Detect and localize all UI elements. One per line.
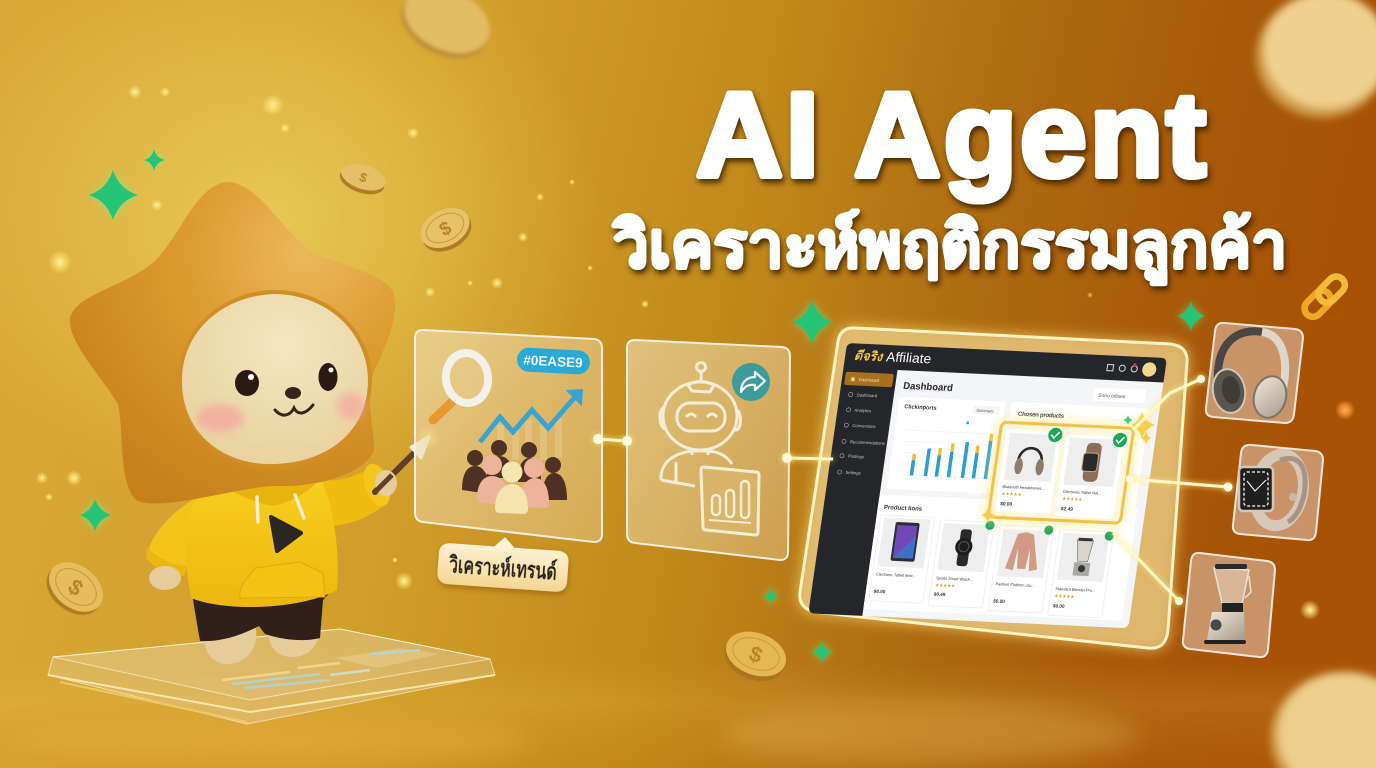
sparkle: green right [1177, 301, 1205, 331]
selected product: headphones: $0.00 [1000, 501, 1013, 508]
coin: upper medium [414, 200, 478, 260]
selected product: headphones: ★★★★★ [1001, 491, 1022, 497]
coin: bottom center: $ [746, 641, 766, 668]
sidebar menu: Conversions [852, 423, 876, 429]
icon: gold chain link [1301, 273, 1348, 320]
connector glow lines [598, 379, 1228, 601]
product: smartwatch [928, 518, 995, 608]
coin: top right blurred [1256, 0, 1376, 118]
mouth [275, 405, 313, 415]
title: AI Agent: AI Agent [696, 68, 1206, 202]
highlighted selection frame [988, 422, 1134, 523]
hood neck [218, 470, 320, 505]
icon: magnifying glass [433, 350, 491, 420]
product: blender [1048, 529, 1114, 618]
selected product: headphones: Bluetooth Headphones... [1002, 485, 1045, 491]
drawstrings [257, 495, 304, 522]
legs [204, 628, 319, 664]
sparkle: green center [792, 300, 833, 344]
sparkle: green left [80, 499, 111, 531]
shorts [192, 586, 336, 641]
coin: lower left [37, 552, 113, 625]
panel: AI robot glass card [627, 340, 790, 560]
nose [285, 387, 301, 399]
tablet glass frame [800, 328, 1187, 648]
coin: upper medium: $ [436, 217, 456, 241]
gold sparkle cluster [981, 412, 1155, 523]
connector nodes [593, 375, 1232, 605]
sidebar menu: Recommendations [850, 439, 885, 446]
header brand [853, 348, 932, 366]
product: blender: Standard Blender Pro... [1055, 587, 1095, 593]
coin: top blurred [391, 0, 501, 71]
panel: tablet dashboard [800, 328, 1187, 648]
date selector [1092, 387, 1146, 403]
pointer stick [375, 426, 440, 496]
product: tablet: $0.00 [874, 589, 886, 594]
tablet screen [808, 343, 1167, 628]
sidebar menu [831, 372, 895, 476]
tag: hashtag [516, 347, 591, 375]
product: smartwatch: $0.49 [934, 592, 946, 597]
coin: upper small: $ [357, 169, 370, 186]
icon: customer crowd [462, 440, 567, 514]
hood rim [178, 290, 372, 470]
product: jacket [988, 523, 1054, 613]
chosen products card: Chosen products [1018, 411, 1065, 420]
date selector: Sono trilises [1098, 393, 1126, 400]
selected product: watch: ★★★★★ [1062, 496, 1083, 502]
coin: lower left: $ [63, 574, 88, 601]
trend chart arrow [480, 390, 582, 460]
product tile: blender [1183, 553, 1275, 657]
coin: bottom right blurred [1270, 672, 1376, 768]
star hood [70, 182, 395, 504]
cheeks [196, 392, 365, 432]
chart card: Clickinports [904, 404, 937, 412]
product: blender: $0.00 [1053, 603, 1065, 609]
icon: teal share badge [732, 363, 770, 401]
glowing light orbs [36, 85, 1355, 620]
product: tablet: Electronic Tablet 8mb... [876, 572, 916, 578]
product: smartwatch: Sports Smart Watch... [936, 576, 973, 582]
product list card [863, 494, 1138, 621]
sidebar menu: Dashboard [856, 392, 878, 398]
pocket [240, 562, 325, 598]
selected product: headphones [995, 430, 1062, 514]
tag: hashtag: #0EASE9 [523, 352, 583, 371]
eyes [235, 363, 338, 396]
icon: bar chart panel [701, 467, 759, 535]
play badge [271, 517, 301, 551]
callout: trend analysis label [437, 533, 570, 592]
sparkle: green top left [89, 170, 138, 220]
subtitle: customer behaviour analysis: วิเคราะห์พฤติกรรมลูกค้า [612, 209, 1287, 285]
sidebar menu: Postings [848, 454, 864, 459]
sparkle: green bottom small [763, 587, 779, 605]
product: jacket: Fashion Platform Jac... [995, 582, 1035, 588]
sidebar menu: Settings [845, 470, 861, 476]
coin: upper small [336, 159, 389, 199]
sidebar menu: Analytics [854, 408, 872, 413]
product: tablet [868, 515, 935, 603]
chart card [887, 397, 1006, 494]
selected product: watch [1055, 434, 1124, 519]
icon: robot outline [660, 362, 740, 486]
panel: trend analysis glass card [415, 330, 602, 542]
header icons [1106, 360, 1157, 377]
coin: bottom center [718, 624, 792, 689]
left arm [146, 495, 203, 590]
product: blender: ★★★★★ [1054, 593, 1075, 599]
check badges [1047, 427, 1128, 448]
sidebar menu: Dashboard [859, 377, 880, 383]
callout: trend analysis label: วิเคราะห์เทรนด์ [447, 551, 558, 585]
chart card: Summary [976, 408, 995, 414]
green sparkle on tablet [1123, 415, 1133, 425]
dashboard heading: Dashboard [902, 381, 954, 394]
product: jacket: $0.00 [993, 598, 1006, 604]
product tile: headphones [1206, 323, 1303, 423]
right arm [310, 460, 395, 526]
glass platform [48, 629, 495, 724]
header brand: Affiliate [885, 349, 932, 366]
selected product: watch: $2.49 [1060, 506, 1074, 513]
character: star mascot [70, 182, 440, 664]
selected product: watch: Electronic Tablet Not... [1063, 490, 1102, 496]
sparkle: green bottom [811, 641, 833, 663]
torso [186, 481, 338, 607]
face [182, 294, 368, 464]
product tile: smartwatch [1233, 445, 1323, 540]
chosen products card [996, 402, 1150, 519]
product: smartwatch: ★★★★★ [935, 582, 955, 588]
sparkle: green small top left [144, 149, 165, 171]
header brand: ดีจริง [853, 348, 885, 364]
product list card: Product lions [883, 504, 923, 513]
